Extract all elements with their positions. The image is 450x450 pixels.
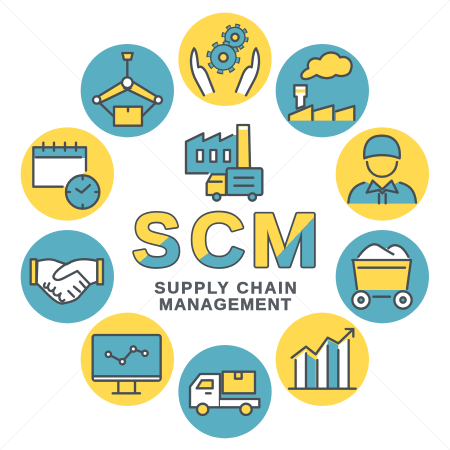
subtitle: supply chain: SUPPLY CHAIN (154, 278, 297, 297)
circle icon: handshake (21, 230, 114, 323)
circle icon: worker with cap (336, 127, 429, 221)
circle icon: hands holding gears (178, 13, 272, 106)
circle icon: rising bar chart with arrow (276, 313, 369, 406)
letter S: S (132, 198, 181, 282)
letter C: C (190, 198, 245, 282)
factory sheds (289, 105, 354, 121)
circle icon: delivery truck (178, 345, 272, 438)
letter C: C (190, 198, 245, 282)
circle icon: crane lifting a box (81, 44, 174, 137)
icon: large gear (211, 45, 236, 70)
factory (186, 133, 237, 173)
letter M: M (251, 198, 319, 282)
chimney (294, 85, 307, 109)
truck (227, 168, 262, 195)
chimney (237, 125, 250, 168)
circle icon: monitor with line chart (81, 313, 174, 406)
subtitle: management: MANAGEMENT (159, 295, 291, 314)
smoke cloud (301, 53, 352, 79)
circle icon: coal mine cart (336, 230, 429, 323)
letter M: M (251, 198, 319, 282)
icon: left hand (191, 48, 214, 95)
center icon: factory and truck (186, 125, 262, 201)
letter S: S (132, 198, 181, 282)
icon: small gear (225, 27, 245, 47)
SCM heading (132, 198, 319, 282)
circle icon: factory with smoke (276, 44, 369, 137)
circle icon: calendar and clock (21, 127, 114, 221)
icon: right hand (236, 48, 259, 95)
